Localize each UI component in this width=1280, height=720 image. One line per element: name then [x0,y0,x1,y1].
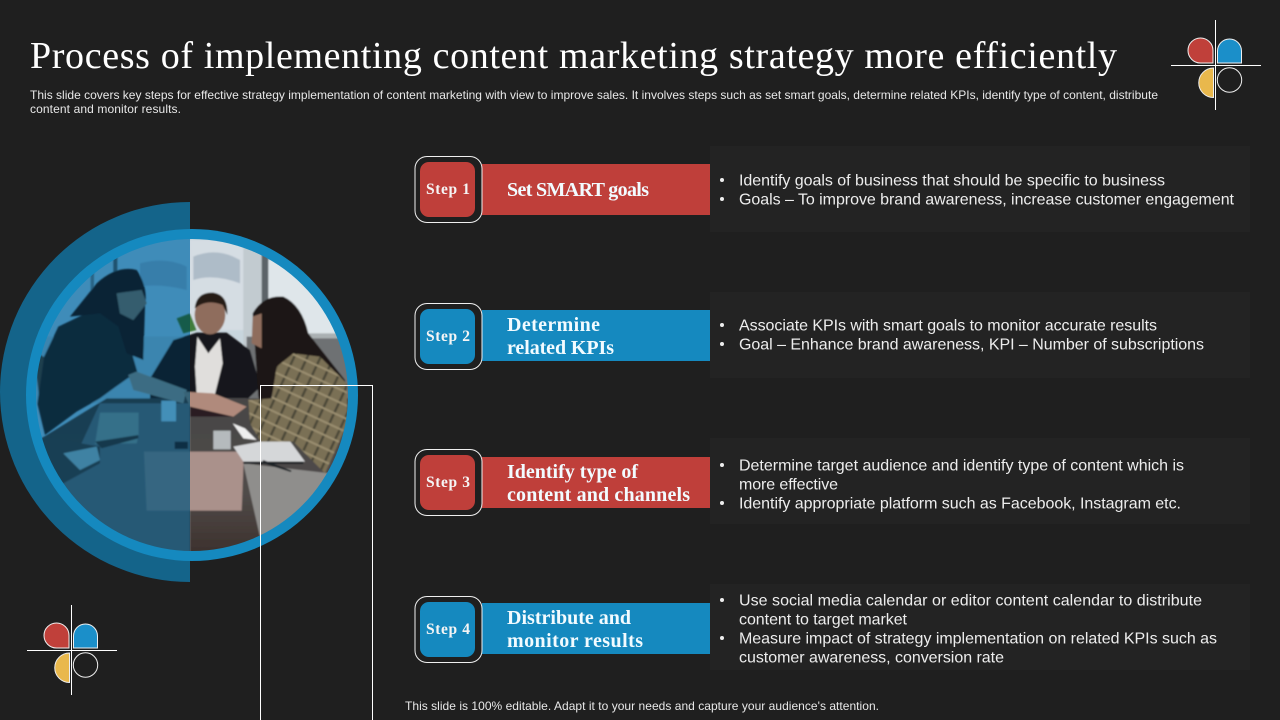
notebook [95,413,139,444]
person left edge [36,354,45,394]
step 2 heading [507,314,614,359]
outer half ring [0,202,190,582]
description text: This slide covers key steps for effective strategy implementation of content marketing with view to improve sales. It involves steps such as set smart goals, determine related KPIs, identify type of content, distribute [30,88,1158,102]
step 3 row [415,438,1250,524]
step 1 bullets [720,172,1235,208]
white outlined rectangle [260,386,372,720]
papers [233,437,305,462]
step 2 badge: Step 2 [426,328,470,345]
photo of team meeting [36,239,348,551]
panel: step 1 details [710,146,1250,232]
step 4 heading: monitor results [507,630,643,652]
icon: four petal logo bottom left [27,605,117,695]
footer note: This slide is 100% editable. Adapt it to your needs and capture your audience's attention. [405,699,879,713]
step 2 bullets: Associate KPIs with smart goals to monitor accurate results [739,318,1157,334]
step 1 bar [482,164,710,215]
step 4 row [415,584,1250,670]
glasses of water [213,431,231,449]
blue tint over left half [30,230,190,560]
step 3 badge: Step 3 [426,474,470,491]
man [150,333,261,398]
step 3 heading: Identify type of [507,461,638,483]
step 4 bullets: customer awareness, conversion rate [739,650,1004,666]
step 1 badge [415,156,482,222]
step 4 heading [507,607,643,652]
step 2 bullets [720,318,1204,354]
woman on left [37,307,137,435]
title: Process of implementing content marketing strategy more efficiently [30,35,1117,77]
panel: step 2 details [710,292,1250,378]
step 4 bullets: content to target market [739,612,908,628]
blue lift over left half [30,230,190,560]
handshake [183,392,247,417]
step 2 bullets: Goal – Enhance brand awareness, KPI – Number of subscriptions [739,336,1204,354]
step 4 bullets [720,592,1217,666]
step 3 bar [482,457,710,508]
step 4 badge [415,596,482,662]
laptop [144,452,244,511]
step 4 bullets: Use social media calendar or editor content calendar to distribute [739,592,1202,610]
step 3 heading: content and channels [507,484,690,506]
back wall [37,337,190,403]
step 3 badge [415,450,482,516]
step 3 bullets [720,458,1184,512]
step 3 bullets: Identify appropriate platform such as Facebook, Instagram etc. [739,496,1181,512]
step 3 heading [507,461,690,506]
step 1 bullets: Identify goals of business that should be specific to business [739,172,1165,190]
step 4 heading: Distribute and [507,607,631,629]
step 2 heading: related KPIs [507,337,614,359]
sky clouds [190,240,243,330]
circular team photo with rings [0,202,360,582]
panel: step 4 details [710,584,1250,670]
step 3 bullets: more effective [739,476,838,494]
step 2 bar [482,310,710,361]
blue ring [26,229,358,561]
step 4 bullets: Measure impact of strategy implementation on related KPIs such as [739,630,1217,648]
step 1 bullets: Goals – To improve brand awareness, increase customer engagement [739,192,1235,208]
table [33,398,353,557]
description text: content and monitor results. [30,102,181,116]
step 3 bullets: Determine target audience and identify type of content which is [739,458,1184,474]
step 2 badge [415,304,482,370]
description text [30,88,1158,116]
step 1 row [415,146,1250,232]
panel: step 3 details [710,438,1250,524]
step 2 heading: Determine [507,314,600,336]
woman on right [252,296,346,400]
step 1 heading: Set SMART goals [507,179,649,201]
step 4 bar [482,603,710,654]
step 4 badge: Step 4 [426,621,470,638]
step 1 badge: Step 1 [426,181,470,198]
step 2 row [415,292,1250,378]
icon: four petal logo top right [1171,20,1261,110]
